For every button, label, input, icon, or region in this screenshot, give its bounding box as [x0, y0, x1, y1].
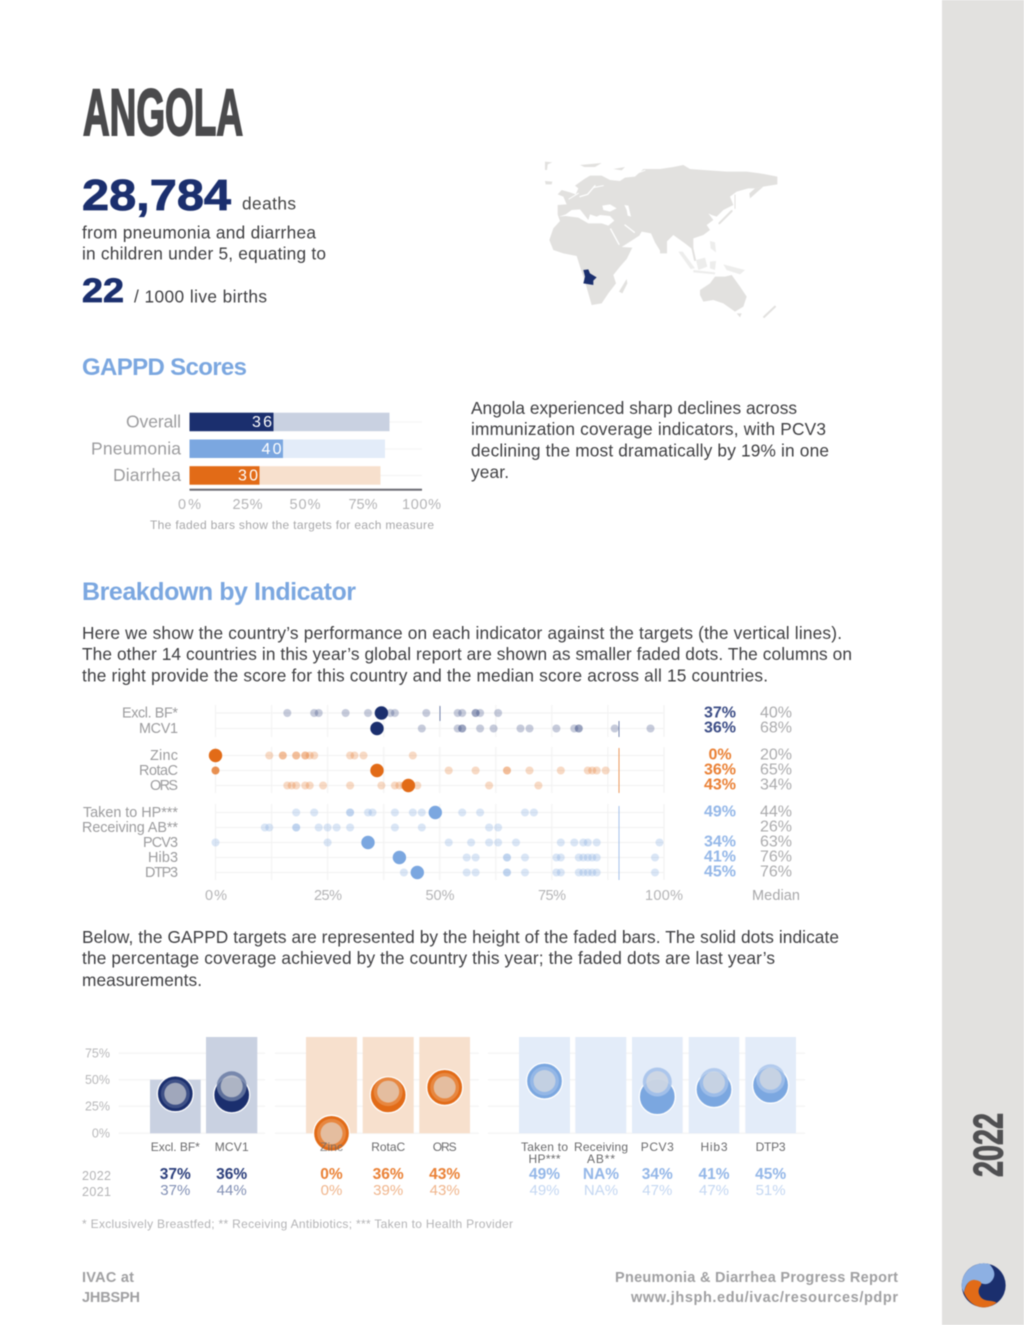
dot plot axis: 50%	[426, 888, 455, 904]
score column: 45%	[704, 864, 736, 880]
stat: deaths: deaths	[242, 194, 296, 214]
row: Zinc: Zinc	[150, 748, 178, 764]
row: ORS	[150, 778, 542, 794]
bar: Diarrhea: Diarrhea	[113, 465, 181, 485]
bar chart axis labels	[178, 497, 441, 513]
indicator labels: Taken to	[521, 1140, 568, 1154]
row: 2022 values: 34%	[642, 1166, 673, 1183]
row: Hib3: Hib3	[148, 850, 178, 866]
footer: organisation: JHBSPH	[82, 1290, 140, 1306]
indicator labels: MCV1	[215, 1140, 249, 1154]
dot plot axis: 75%	[538, 888, 566, 904]
text block: indicator intro: the right provide the score for this country and the median score across all 15 countries.	[82, 666, 768, 686]
score column: 0%	[708, 746, 732, 764]
stat: deaths: in children under 5, equating to	[82, 244, 326, 264]
row: MCV1	[139, 721, 654, 737]
dots: ORS	[427, 1069, 463, 1105]
text block: targets intro	[82, 927, 839, 990]
row: 2022 values: 36%	[373, 1166, 404, 1183]
median column: 63%	[760, 834, 792, 850]
dots: DTP3	[753, 1064, 789, 1103]
bar chart caption: The faded bars show the targets for each measure	[150, 518, 434, 532]
median column: 44%	[760, 804, 792, 820]
footnote: * Exclusively Breastfed; ** Receiving Antibiotics; *** Taken to Health Provider	[82, 1217, 513, 1231]
score column	[704, 704, 736, 880]
dot plot axis: 25%	[314, 888, 342, 904]
median column: 26%	[760, 818, 792, 836]
bar: Overall: 36	[252, 414, 272, 431]
title: ANGOLA	[83, 75, 243, 149]
dots: PCV3	[639, 1068, 675, 1115]
bar: Pneumonia: 40	[262, 441, 282, 458]
stat: deaths	[82, 171, 326, 264]
median column: 65%	[760, 762, 792, 778]
median column: 40%	[760, 704, 792, 722]
target lines	[440, 706, 619, 880]
indicator labels: PCV3	[641, 1140, 674, 1154]
y axis labels: 25%	[85, 1100, 110, 1114]
score column: 49%	[704, 804, 736, 820]
icon: report logo	[962, 1263, 1006, 1307]
indicator labels: AB**	[587, 1152, 615, 1166]
row: 2021 values: 49%	[529, 1182, 560, 1199]
indicator labels: Receiving	[574, 1140, 628, 1154]
indicator labels: Zinc	[320, 1140, 343, 1154]
score column: 36%	[704, 762, 736, 778]
dots: Excl. BF	[157, 1076, 193, 1112]
row: Receiving AB: Receiving AB**	[82, 820, 178, 836]
indicator labels	[151, 1140, 786, 1166]
row: DTP3: DTP3	[145, 865, 178, 881]
row: 2021 values: NA%	[584, 1182, 618, 1199]
footer: organisation	[82, 1270, 140, 1306]
row: 2022 values: 41%	[698, 1166, 730, 1183]
sidebar year: 2022	[964, 1113, 1012, 1177]
row: 2022 values: 45%	[755, 1166, 786, 1183]
median column: 20%	[760, 746, 792, 764]
row: 2021 values: 39%	[373, 1182, 403, 1199]
target bars	[150, 1037, 796, 1133]
sidebar	[942, 0, 1024, 1325]
median column: 34%	[760, 776, 792, 794]
row: 2021 values: 2021	[82, 1185, 111, 1199]
footer: organisation: IVAC at	[82, 1270, 134, 1286]
row: RotaC: RotaC	[139, 763, 178, 779]
dot plot axis: Median	[752, 888, 800, 904]
heading: Breakdown by Indicator: Breakdown by Indicator	[82, 578, 356, 606]
text block: targets intro: the percentage coverage achieved by the country this year; the faded dots are last year’s	[82, 948, 775, 968]
row: 2021 values: 47%	[699, 1182, 729, 1199]
row: Zinc	[150, 748, 417, 764]
row: 2022 values: NA%	[583, 1166, 619, 1183]
row: 2022 values: 37%	[160, 1166, 191, 1183]
dot plot axis: 100%	[645, 888, 683, 904]
map highlight: Angola	[583, 269, 597, 285]
median column	[760, 704, 792, 880]
bar: Diarrhea: 30	[238, 468, 258, 484]
dot plot axis: 0%	[205, 888, 227, 904]
score column: 41%	[704, 848, 736, 866]
row: Hib3	[148, 850, 659, 866]
dot plot: indicators	[82, 704, 800, 904]
dots: Zinc	[314, 1115, 350, 1151]
row: 2022 values: 49%	[529, 1166, 560, 1183]
bar chart: GAPPD scores	[91, 412, 441, 532]
dots: MCV1	[214, 1071, 250, 1113]
text block: summary: immunization coverage indicators, with PCV3	[471, 419, 826, 439]
row: 2021 values: 0%	[321, 1182, 342, 1199]
bar: Diarrhea	[113, 465, 380, 485]
indicator labels: HP***	[528, 1152, 561, 1166]
footer: report reference	[615, 1270, 898, 1306]
row: 2022 values: 36%	[216, 1166, 247, 1183]
text block: targets intro: Below, the GAPPD targets are represented by the height of the faded bars. The solid dots indicate	[82, 927, 839, 947]
row: 2022 values: 43%	[429, 1166, 460, 1183]
world map	[545, 162, 777, 317]
indicator labels: ORS	[433, 1140, 457, 1154]
text block: summary	[471, 398, 829, 482]
row: PCV3	[143, 835, 664, 851]
dots: Taken to HP	[526, 1063, 562, 1099]
bar: Overall	[126, 412, 390, 432]
footer: report reference: www.jhsph.edu/ivac/resources/pdpr	[630, 1290, 898, 1306]
row: 2022 values	[82, 1166, 786, 1183]
footer: report reference: Pneumonia & Diarrhea Progress Report	[615, 1270, 898, 1286]
y axis labels: 0%	[92, 1126, 110, 1140]
text block: targets intro: measurements.	[82, 970, 202, 990]
row: Taken to HP: Taken to HP***	[83, 805, 178, 821]
bar: Overall: Overall	[126, 412, 181, 432]
bar chart axis labels: 50%	[290, 497, 321, 513]
bar chart axis labels: 0%	[178, 497, 201, 513]
text block: indicator intro: The other 14 countries in this year’s global report are shown as smaller faded dots. The columns on	[82, 644, 852, 664]
stat: deaths: 28,784	[82, 171, 232, 220]
text block: summary: Angola experienced sharp declines across	[471, 398, 797, 418]
row: Receiving AB	[82, 820, 502, 836]
stat: deaths: from pneumonia and diarrhea	[82, 222, 316, 242]
indicator labels: Excl. BF*	[151, 1140, 200, 1154]
score column: 34%	[704, 834, 736, 850]
bar: Pneumonia: Pneumonia	[91, 438, 181, 458]
bar chart axis labels: 25%	[232, 497, 263, 513]
row: 2021 values: 51%	[756, 1182, 786, 1199]
score column: 36%	[704, 720, 736, 736]
row: 2022 values: 2022	[82, 1169, 111, 1183]
row: 2021 values: 47%	[642, 1182, 672, 1199]
dots: Hib3	[696, 1068, 732, 1108]
row: 2021 values: 44%	[217, 1182, 247, 1199]
median column: 68%	[760, 720, 792, 736]
row: RotaC	[139, 763, 610, 779]
text block: summary: year.	[471, 462, 509, 482]
indicator labels: DTP3	[756, 1140, 786, 1154]
bar chart axis labels: 100%	[402, 497, 441, 513]
text block: indicator intro: Here we show the country’s performance on each indicator against the targets (the vertical lines).	[82, 623, 842, 643]
bar chart axis labels: 75%	[348, 497, 378, 513]
score column: 43%	[704, 776, 736, 794]
stat: rate per live births: 22	[82, 272, 124, 310]
indicator labels: RotaC	[371, 1140, 406, 1154]
indicator labels: Hib3	[700, 1140, 728, 1154]
row: ORS: ORS	[150, 778, 178, 794]
row: 2021 values	[82, 1182, 786, 1199]
heading: GAPPD Scores: GAPPD Scores	[82, 354, 247, 381]
y axis labels: 50%	[85, 1073, 110, 1087]
y axis labels: 75%	[85, 1046, 110, 1060]
median column: 76%	[760, 848, 792, 866]
stat: rate per live births: / 1000 live births	[134, 286, 267, 306]
median column: 76%	[760, 864, 792, 880]
row: Excl. BF	[122, 706, 502, 722]
row: Excl. BF: Excl. BF*	[122, 706, 178, 722]
row: DTP3	[145, 865, 659, 881]
row: Taken to HP	[83, 805, 538, 821]
y axis labels	[85, 1046, 110, 1140]
score column: 37%	[704, 704, 736, 722]
row: 2022 values: 0%	[320, 1166, 343, 1183]
row: MCV1: MCV1	[139, 721, 178, 737]
stat: rate per live births	[82, 272, 267, 310]
row: 2021 values: 37%	[160, 1182, 190, 1199]
dots: RotaC	[370, 1077, 406, 1113]
row: 2021 values: 43%	[430, 1182, 460, 1199]
text block: indicator intro	[82, 623, 852, 686]
row: PCV3: PCV3	[143, 835, 178, 851]
coverage chart	[82, 1037, 805, 1199]
text block: summary: declining the most dramatically by 19% in one	[471, 440, 829, 460]
dot plot axis	[205, 888, 800, 904]
bar: Pneumonia	[91, 438, 385, 458]
